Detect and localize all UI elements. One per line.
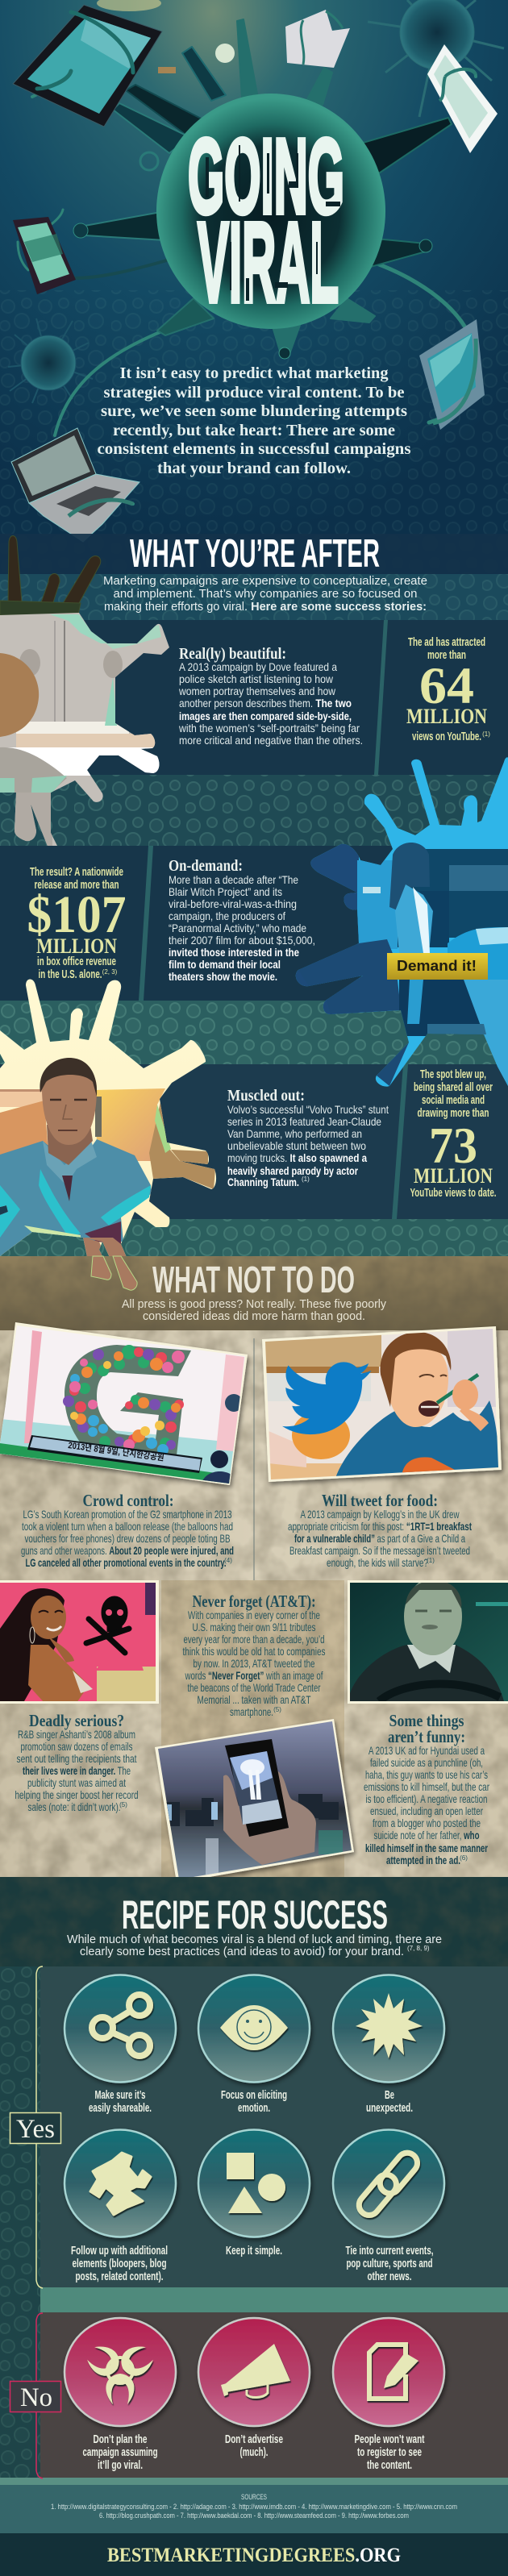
text: crowd control: (4)	[224, 1557, 232, 1564]
icon: van damme hand overlap	[91, 1256, 137, 1290]
text: never forget: smartphone.	[230, 1705, 273, 1718]
text: some things aren't funny: suicide note of her father, who	[374, 1829, 479, 1841]
icon: hand	[223, 1771, 316, 1865]
icon: share	[92, 1995, 150, 2056]
card: emotion	[198, 1975, 310, 2115]
text: dove story: women portray themselves and how	[178, 685, 336, 697]
text: deadly serious: R&B singer Ashanti’s 2008 album	[18, 1728, 135, 1741]
text: on-demand story: theaters show the movie.	[169, 970, 277, 983]
heading: some things aren't funny: aren’t funny:	[388, 1727, 465, 1746]
caption banner: 2013년 8월 9일, 난지한강공원	[68, 1439, 164, 1463]
text: deadly serious: (5)	[119, 1801, 127, 1808]
heading: will tweet for food: Will tweet for food:	[322, 1491, 438, 1510]
logo: bestmarketingdegrees.org: BESTMARKETINGDEGREES.ORG	[107, 2545, 401, 2566]
text: never forget	[182, 1592, 326, 1718]
panel: what not to do heading	[0, 1256, 508, 1330]
label: no	[10, 2382, 61, 2412]
text: crowd control: LG canceled all other promotional events in the country.	[26, 1556, 226, 1569]
stat: 107 million: in the U.S. alone.	[39, 968, 102, 981]
label: emotion.	[238, 2101, 270, 2115]
text: never forget: U.S. making their own 9/11 tributes	[192, 1621, 316, 1633]
heading: crowd control: Crowd control:	[82, 1491, 174, 1510]
icon: document and pencil	[369, 2345, 418, 2399]
panel: muscled out story	[0, 1064, 508, 1219]
text: what not intro: considered ideas did more harm than good.	[143, 1310, 365, 1323]
intro text	[97, 365, 411, 477]
stat: 107 million: (2, 3)	[102, 968, 118, 976]
text: some things aren't funny: attempted in the ad.	[386, 1854, 460, 1866]
text: never forget: the beacons of the World Trade Center	[187, 1681, 321, 1694]
icon: tablet right	[419, 319, 485, 430]
stat: 64 million	[406, 636, 490, 743]
label	[355, 2432, 425, 2472]
text: muscled out story: Volvo’s successful “Volvo Trucks” stunt	[227, 1103, 389, 1116]
text: some things aren't funny: (6)	[460, 1854, 468, 1862]
stat: 73 million: MILLION	[414, 1164, 493, 1188]
text: deadly serious: helping the singer boost her record	[15, 1788, 139, 1801]
text: on-demand story: Blair Witch Project” and its	[169, 885, 282, 898]
label: campaign assuming	[82, 2445, 158, 2459]
icon: chain	[355, 2149, 422, 2220]
label: it’ll go viral.	[98, 2458, 143, 2472]
text: muscled out story	[227, 1103, 389, 1188]
card: unexpected	[333, 1975, 444, 2115]
heading: never forget: Never forget (AT&T):	[192, 1592, 316, 1611]
text: crowd control	[21, 1491, 234, 1569]
icon: shapes	[227, 2153, 285, 2213]
heading: on-demand: On-demand:	[169, 857, 243, 875]
card: tie in	[333, 2130, 444, 2283]
image: van damme virus	[0, 979, 216, 1256]
text: will tweet for food	[288, 1491, 472, 1569]
icon: dark virus spikes above dove image	[0, 535, 101, 615]
text: muscled out story: moving trucks. It also spawned a	[227, 1151, 367, 1164]
label: other news.	[368, 2270, 411, 2283]
text: after intro: making their efforts go viral. Here are some success stories:	[104, 600, 427, 614]
text: on-demand story: invited those interested in the	[169, 946, 299, 959]
label: posts, related content).	[76, 2270, 163, 2283]
label	[366, 2088, 413, 2115]
label: yes: Yes	[16, 2115, 55, 2144]
text: deadly serious: promotion saw dozens of emails	[21, 1740, 132, 1753]
text: dove story: more critical and negative than the others.	[179, 734, 363, 747]
button: demand it: Demand it!	[397, 958, 477, 974]
stat: 107 million: release and more than	[34, 879, 119, 892]
heading: real(ly) beautiful: Real(ly) beautiful:	[179, 645, 286, 663]
text: after intro: Marketing campaigns are expensive to conceptualize, create	[103, 574, 427, 588]
text: dove story: another person describes them. The two	[179, 697, 352, 710]
text: never forget: words “Never Forget” with an image of	[185, 1669, 323, 1682]
text: what not intro: All press is good press? Not really. These five poorly	[122, 1298, 387, 1311]
bracket: yes	[36, 1966, 43, 2288]
text: on-demand story: their 2007 film for about $15,000,	[169, 934, 315, 947]
card: keep it simple	[198, 2130, 310, 2258]
intro text: sure, we’ve seen some blundering attempts	[101, 403, 407, 420]
balloons	[63, 1345, 185, 1455]
panel: dove story	[0, 535, 508, 861]
label: People won’t want	[355, 2432, 425, 2446]
stat: 64 million: MILLION	[406, 705, 487, 728]
label	[71, 2244, 168, 2283]
icon: biohazard	[84, 2341, 156, 2404]
kid sweater	[335, 1400, 500, 1484]
stat: 107 million: The result? A nationwide	[30, 866, 123, 879]
stat: 64 million: 64	[419, 657, 474, 715]
stat: 107 million	[27, 866, 126, 981]
label: no: No	[20, 2383, 52, 2412]
text: on-demand story	[169, 873, 315, 983]
icon: small virus top right	[368, 0, 504, 117]
image: dove sketch artist	[0, 609, 173, 861]
text: dove story	[178, 660, 363, 747]
icon: megaphone	[221, 2344, 290, 2398]
text: what not intro	[122, 1298, 387, 1323]
image: blue virus paranormal activity	[290, 754, 508, 1088]
label	[221, 2088, 287, 2115]
icon: skull and crossbones	[86, 1596, 129, 1653]
label: Don’t advertise	[225, 2432, 283, 2446]
heading: some things aren't funny	[388, 1711, 465, 1746]
title	[188, 117, 344, 326]
photo: ashanti with skull	[0, 1580, 159, 1704]
text: muscled out story: (1)	[302, 1176, 310, 1183]
text: after intro: and implement. That’s why companies are so focused on	[113, 587, 418, 601]
virus spikes	[73, 19, 452, 359]
text: on-demand story: campaign, the producers of	[169, 909, 285, 922]
stat: 73 million: 73	[429, 1117, 477, 1174]
label: Make sure it’s	[95, 2088, 145, 2102]
text: never forget: think this would be old hat to companies	[182, 1645, 326, 1658]
footer	[0, 2533, 508, 2576]
text: never forget: (5)	[273, 1706, 281, 1713]
virus body	[156, 94, 385, 329]
text: on-demand story: “Paranormal Activity,” who made	[169, 922, 306, 934]
label: pop culture, sports and	[347, 2257, 432, 2270]
label: to register to see	[357, 2445, 422, 2459]
label: Keep it simple.	[226, 2244, 282, 2258]
stat: 64 million: (1)	[482, 730, 490, 738]
card: follow up	[65, 2130, 176, 2283]
intro text: strategies will produce viral content. To be	[103, 385, 405, 402]
text: dove story: images are then compared side-by-side,	[179, 710, 352, 722]
photo: lg balloons	[0, 1322, 250, 1488]
intro text: recently, but take heart: There are some	[113, 422, 395, 439]
text: sources: 6. http://blog.crushpath.com - 7. http://www.baekdal.com - 8. http://www.steamfeed.com - 9. http://www.forbes.com	[99, 2511, 409, 2520]
text: will tweet for food: appropriate criticism for this post: “1RT=1 breakfast	[288, 1520, 472, 1533]
heading: deadly serious: Deadly serious?	[29, 1711, 124, 1730]
icon: burst	[356, 1993, 423, 2058]
text: sources: SOURCES	[241, 2493, 267, 2502]
text: sources	[51, 2493, 457, 2520]
label	[225, 2432, 283, 2459]
text: dove story: with the women’s “self-portraits” being far	[178, 722, 360, 735]
icon: small virus lower left	[8, 318, 93, 403]
label	[82, 2432, 158, 2472]
title distress marks	[206, 145, 340, 301]
card: registration	[333, 2318, 444, 2472]
photo: at&t phone	[153, 1717, 355, 1883]
text: on-demand story: viral-before-viral-was-a-thing	[169, 897, 297, 910]
icon: tablet top left	[13, 5, 162, 127]
text: recipe intro	[67, 1933, 442, 1958]
stat: 107 million: MILLION	[36, 934, 117, 958]
text: on-demand story: film to demand their local	[169, 958, 281, 971]
text: will tweet for food: (1)	[427, 1557, 435, 1564]
tentacles	[18, 21, 476, 516]
text: will tweet for food: for a vulnerable child” as part of a Give a Child a	[294, 1532, 465, 1545]
icon: eye with smile	[220, 2005, 288, 2050]
stat: 107 million: in box office revenue	[37, 955, 116, 968]
icon: puzzle piece	[90, 2153, 151, 2215]
card: don't plan	[65, 2318, 176, 2472]
panel: recipe for success	[0, 1877, 508, 2533]
label: Follow up with additional	[71, 2244, 168, 2258]
text: dove story: police sketch artist listening to how	[179, 672, 334, 685]
icon: twitter bird	[282, 1362, 371, 1434]
band: patterned gaps	[0, 775, 508, 1256]
label: Tie into current events,	[345, 2244, 434, 2258]
label: (much).	[240, 2445, 268, 2459]
photo: kellogg's kid with twitter bird	[262, 1326, 504, 1484]
intro text: that your brand can follow.	[157, 460, 351, 477]
text: muscled out story: heavily shared parody by actor	[227, 1164, 358, 1177]
text: recipe intro: While much of what becomes viral is a blend of luck and timing, there are	[67, 1933, 442, 1946]
text: some things aren't funny	[364, 1711, 489, 1866]
icon: laptop	[11, 428, 139, 542]
text: muscled out story: Channing Tatum.	[227, 1176, 299, 1188]
photo: hyundai driver	[348, 1578, 508, 1704]
panel: heading band what you're after	[0, 532, 508, 620]
label: unexpected.	[366, 2101, 413, 2115]
card: shareable	[65, 1975, 176, 2115]
balloon g backing	[65, 1345, 191, 1455]
label: the content.	[367, 2458, 412, 2472]
text: deadly serious: publicity stunt was aimed at	[27, 1776, 126, 1789]
label	[89, 2088, 152, 2115]
label	[345, 2244, 434, 2283]
kid head	[390, 1349, 448, 1427]
icon: smartphone	[225, 1739, 289, 1837]
text: crowd control: took a violent turn when a balloon release (the balloons had	[22, 1520, 233, 1533]
label: easily shareable.	[89, 2101, 152, 2115]
text: never forget: Memorial ... taken with an AT&T	[197, 1693, 311, 1706]
intro text: It isn’t easy to predict what marketing	[119, 365, 389, 382]
button: demand it	[387, 953, 488, 980]
bracket: no	[36, 2313, 43, 2478]
stat: 73 million	[410, 1068, 497, 1200]
text: muscled out story: series in 2013 featured Jean-Claude	[227, 1115, 381, 1128]
text: deadly serious: sales (note: it didn’t work).	[27, 1800, 121, 1813]
text: recipe intro: clearly some best practices (and ideas to avoid) for your brand.	[80, 1946, 404, 1958]
icon: phone left	[13, 217, 76, 294]
label: elements (bloopers, blog	[73, 2257, 166, 2270]
text: muscled out story: unbelievable stunt between two	[227, 1139, 366, 1152]
intro text: consistent elements in successful campaigns	[97, 441, 411, 458]
heading: muscled out: Muscled out:	[227, 1087, 305, 1105]
text: recipe intro: (7, 8, 9)	[407, 1945, 430, 1952]
heading: what not to do: WHAT NOT TO DO	[152, 1259, 355, 1300]
panel: on-demand story	[0, 846, 508, 1001]
icon: white paper top	[285, 10, 350, 68]
caption banner	[27, 1435, 202, 1473]
text: after intro	[103, 574, 427, 614]
text: crowd control: guns and other weapons. About 20 people were injured, and	[21, 1544, 234, 1557]
label: Focus on eliciting	[221, 2088, 287, 2102]
text: deadly serious: sent out telling the recipients that	[16, 1752, 137, 1765]
text: crowd control: vouchers for free phones) drew dozens of people toting BB	[24, 1532, 231, 1545]
panel: paper not-to-do	[0, 1330, 508, 1877]
text: never forget: With companies in every corner of the	[188, 1608, 320, 1621]
icon: white phone right	[427, 44, 498, 153]
label: Don’t plan the	[94, 2432, 147, 2446]
text: on-demand story: More than a decade after “The	[169, 873, 298, 886]
heading: some things aren't funny: Some things	[389, 1711, 464, 1730]
text: deadly serious	[15, 1711, 139, 1813]
card: don't advertise	[198, 2318, 310, 2459]
panel: hero	[0, 0, 508, 621]
text: crowd control: LG’s South Korean promotion of the G2 smartphone in 2013	[23, 1508, 232, 1521]
text: never forget: every year for more than a decade, you’d	[184, 1633, 324, 1646]
text: dove story: A 2013 campaign by Dove featured a	[179, 660, 337, 673]
label: Be	[385, 2088, 394, 2102]
text: never forget: by now. In 2013, AT&T tweeted the	[194, 1657, 315, 1670]
text: muscled out story: Van Damme, who performed an	[227, 1127, 362, 1140]
stat: 107 million: $107	[27, 885, 126, 944]
text: deadly serious: their lives were in danger. The	[23, 1764, 131, 1777]
text: will tweet for food: enough, the kids will starve?	[327, 1556, 428, 1569]
stat: 64 million: more than	[427, 649, 466, 662]
